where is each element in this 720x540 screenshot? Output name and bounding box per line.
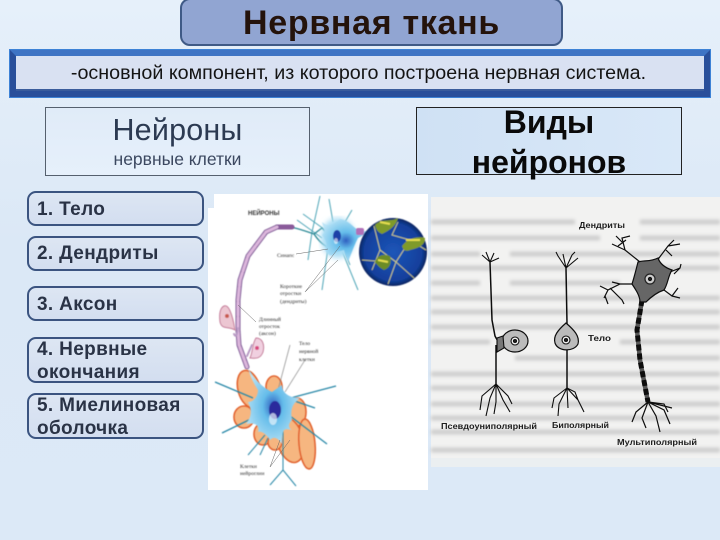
subheading: nerve cells: нервные клетки (114, 149, 241, 169)
diagram captions: Длинный (259, 316, 281, 323)
diagram captions: НЕЙРОНЫ (248, 209, 280, 217)
bipolar neuron (552, 252, 584, 416)
diagram captions: (аксон) (259, 330, 276, 337)
diagram captions: отростки (280, 291, 301, 297)
item: myelin sheath: 5. Миелиновая (37, 395, 181, 416)
item: dendrites: 2. Дендриты (37, 243, 159, 264)
multipolar neuron (600, 236, 681, 432)
scan labels: Биполярный (552, 420, 609, 430)
title: Нервная ткань (243, 4, 500, 42)
axon terminal bulbs (220, 306, 264, 358)
panel: neuron types heading: нейронов (472, 144, 626, 180)
glia micrograph circle (359, 218, 427, 286)
item: nerve endings: окончания (37, 362, 140, 382)
item: axon (27, 286, 204, 321)
diagram captions: клетки (299, 357, 315, 363)
panel: neuron types heading (416, 107, 682, 175)
definition banner (10, 50, 710, 97)
scan labels: Псевдоуниполярный (441, 421, 537, 431)
item: nerve endings (27, 337, 204, 383)
diagram captions: Тело (299, 341, 310, 347)
scan labels: Дендриты (579, 220, 625, 230)
scan labels: Тело (588, 333, 611, 343)
upper neuron cell body (321, 218, 370, 262)
item: myelin sheath: оболочка (37, 418, 128, 439)
title (180, 0, 563, 46)
diagram captions (240, 209, 318, 477)
lower neuron cell body (215, 345, 336, 486)
image: types of neurons scan (431, 197, 720, 467)
upper neuron dendrites (291, 196, 358, 290)
item: axon: 3. Аксон (37, 294, 118, 315)
item: dendrites (27, 236, 204, 271)
panel: neurons heading (45, 107, 310, 176)
scan labels (441, 220, 697, 447)
diagram captions: нейроглии (240, 470, 264, 477)
diagram captions: (дендриты) (280, 298, 307, 305)
definition banner: -основной компонент, из которого построена нервная система. (71, 62, 646, 84)
scan labels: Мультиполярный (617, 437, 697, 447)
item: myelin sheath (27, 393, 204, 439)
diagram captions: Клетки (240, 464, 257, 470)
neuroglia cells (233, 368, 317, 470)
item: body: 1. Тело (37, 199, 105, 220)
item: nerve endings: 4. Нервные (37, 339, 147, 360)
diagram captions: отросток (259, 324, 280, 330)
myelinated axon (234, 227, 292, 367)
diagram captions: Короткие (280, 284, 303, 290)
image: neuron anatomy diagram (208, 194, 428, 490)
panel: neuron types heading: Виды (504, 104, 594, 140)
diagram captions: нервной (299, 348, 318, 355)
caption leader lines (238, 246, 340, 467)
faint scanned text lines (431, 222, 720, 450)
item: body (27, 191, 204, 226)
heading: neurons: Нейроны (112, 113, 243, 147)
pseudounipolar neuron (480, 252, 528, 416)
diagram captions: Синапс (277, 253, 295, 259)
